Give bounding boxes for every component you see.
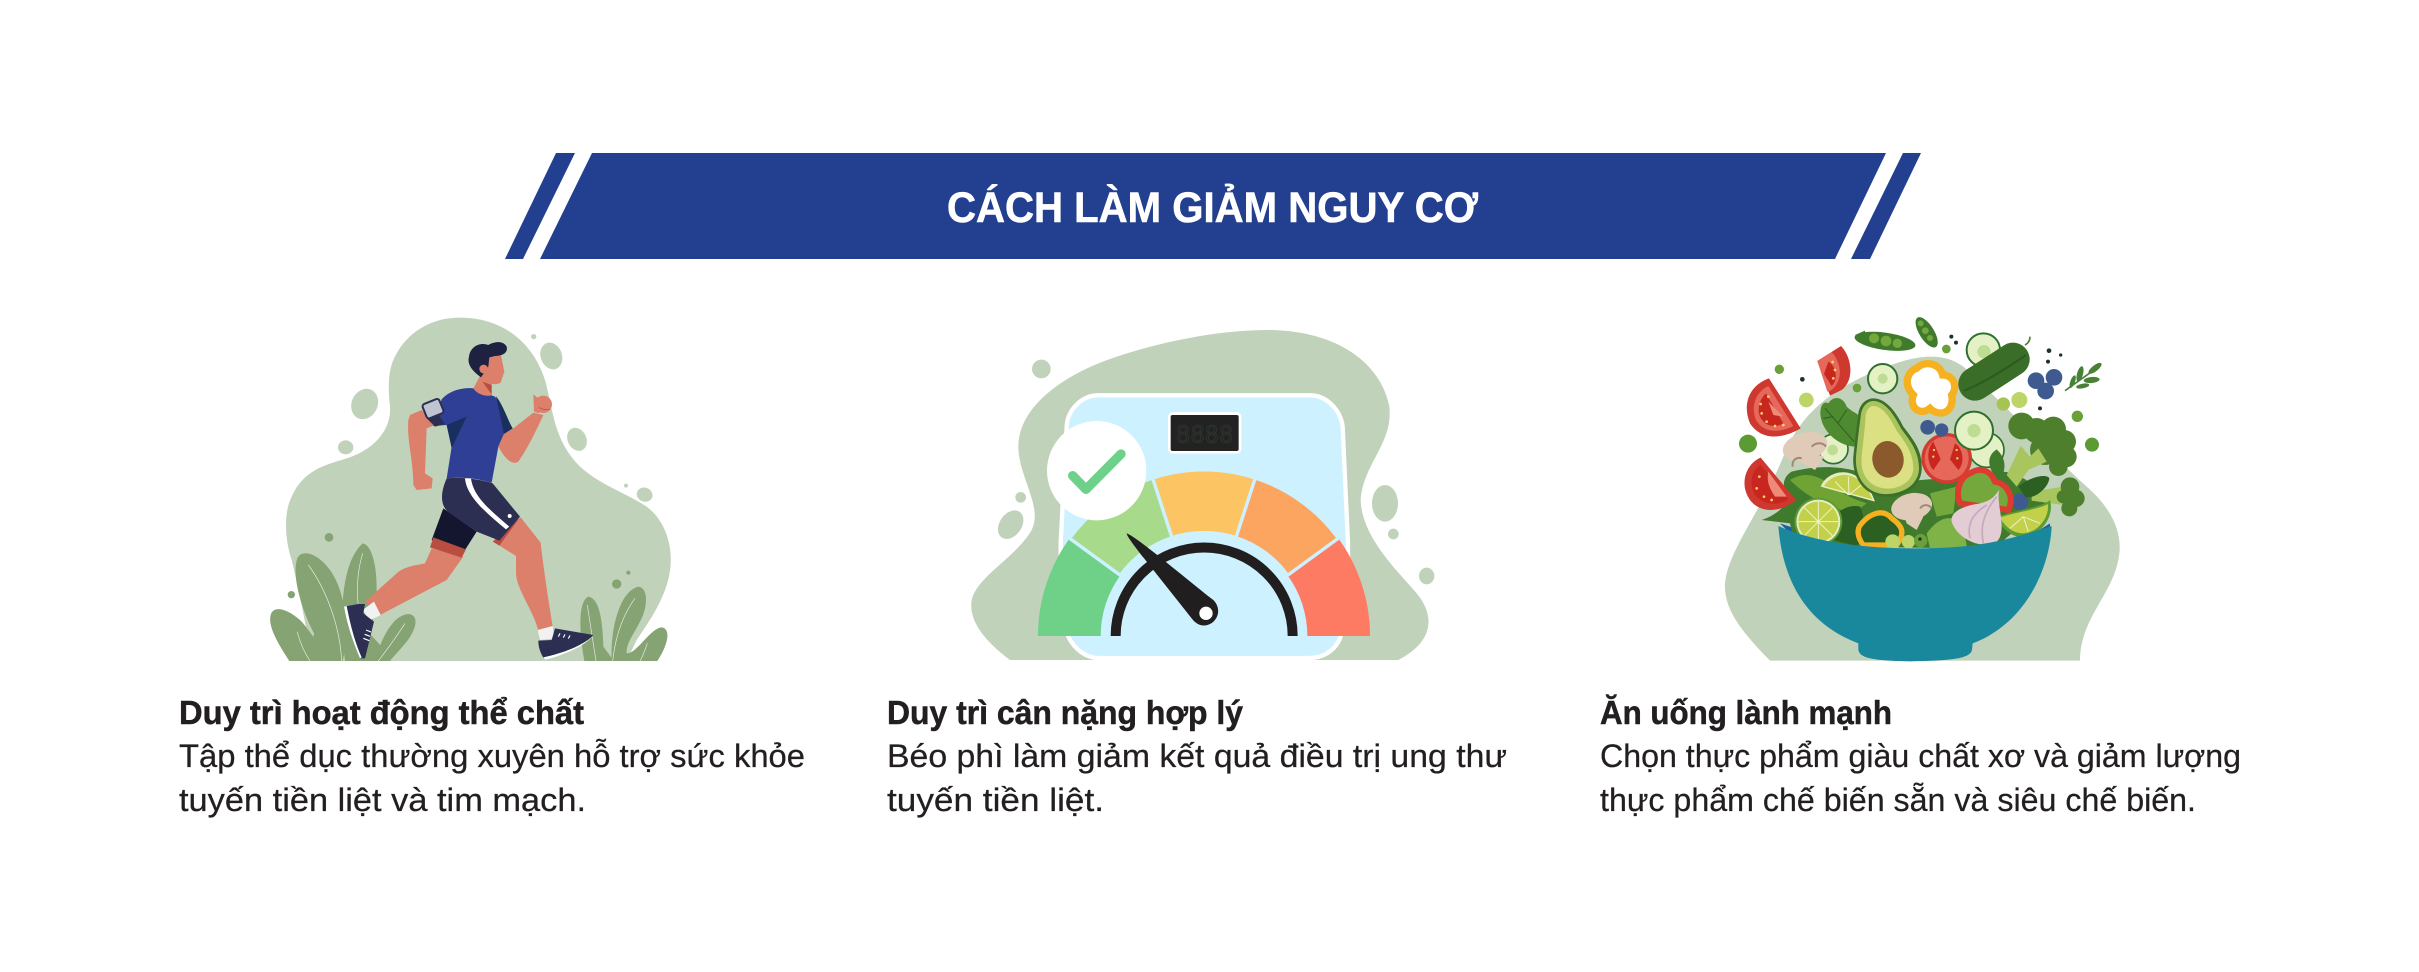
banner: title ribbon (505, 153, 1921, 259)
mushroom centre (1889, 489, 1935, 530)
blueberries (1920, 369, 2062, 510)
heading: Duy trì hoạt động thể chất (179, 694, 584, 731)
title: CÁCH LÀM GIẢM NGUY CƠ (947, 183, 1478, 232)
spinach leaf (1989, 449, 2004, 480)
illustration: salad bowl (1725, 314, 2120, 661)
garlic (1951, 489, 2002, 545)
weight display (1168, 412, 1241, 454)
tomato wedges (1744, 346, 1850, 510)
illustration: runner (270, 318, 671, 661)
heading: Ăn uống lành mạnh (1600, 694, 1892, 731)
mushroom left (1779, 427, 1831, 470)
shirt (433, 388, 513, 483)
dark leaf (2018, 476, 2049, 497)
front leg (493, 517, 553, 631)
shorts (432, 508, 477, 550)
text block: healthy eating (1600, 694, 2241, 818)
gauge arc (1116, 547, 1293, 636)
armband and phone (426, 407, 445, 427)
back shoe (363, 602, 381, 621)
illustration: scale (971, 330, 1434, 660)
whole cucumber (1952, 336, 2036, 407)
cucumber slices (1827, 333, 2000, 455)
tomato slice (1921, 433, 1972, 484)
yellow pepper lower (1858, 513, 1902, 545)
gauge segments (1038, 470, 1370, 636)
lime half right (1997, 500, 2051, 537)
text block: physical activity: Tập thể dục thường xuyên hỗ trợ sức khỏe (179, 738, 805, 774)
avocado (1853, 398, 1922, 497)
leaf (1820, 398, 1858, 447)
scale body (1061, 395, 1348, 658)
big cucumber slice behind (1969, 433, 2004, 467)
text block: physical activity (179, 694, 805, 818)
lime half (1821, 472, 1875, 502)
pea pod lower (1853, 314, 1942, 354)
red pepper ring (1958, 470, 2011, 510)
big broccoli (2007, 413, 2077, 487)
bowl inside (1780, 523, 2050, 547)
right arm (498, 413, 543, 463)
text block: healthy eating: Chọn thực phẩm giàu chất xơ và giảm lượng (1600, 738, 2241, 774)
heading: Duy trì cân nặng hợp lý (887, 694, 1244, 731)
weight display: 8888 (1176, 420, 1233, 450)
bowl (1778, 526, 2052, 661)
small broccoli (2032, 477, 2085, 516)
herb sprig (2065, 361, 2103, 391)
lime slice (1794, 498, 1842, 546)
text block: healthy weight: tuyến tiền liệt. (887, 782, 1104, 818)
text block: healthy weight: Béo phì làm giảm kết quả điều trị ung thư (887, 738, 1507, 774)
front shoe (538, 626, 554, 640)
peas bottom (1885, 534, 1927, 549)
back leg (365, 548, 463, 615)
text block: healthy eating: thực phẩm chế biến sẵn và siêu chế biến. (1600, 782, 2196, 818)
needle (1127, 533, 1218, 626)
check badge (1047, 421, 1146, 520)
scattered dots (1739, 335, 2099, 453)
text block: healthy weight (887, 694, 1507, 818)
left arm (408, 410, 435, 490)
yellow pepper ring (1907, 364, 1955, 413)
head (473, 370, 492, 396)
text block: physical activity: tuyến tiền liệt và tim mạch. (179, 782, 586, 818)
salad greens (1762, 467, 2047, 548)
